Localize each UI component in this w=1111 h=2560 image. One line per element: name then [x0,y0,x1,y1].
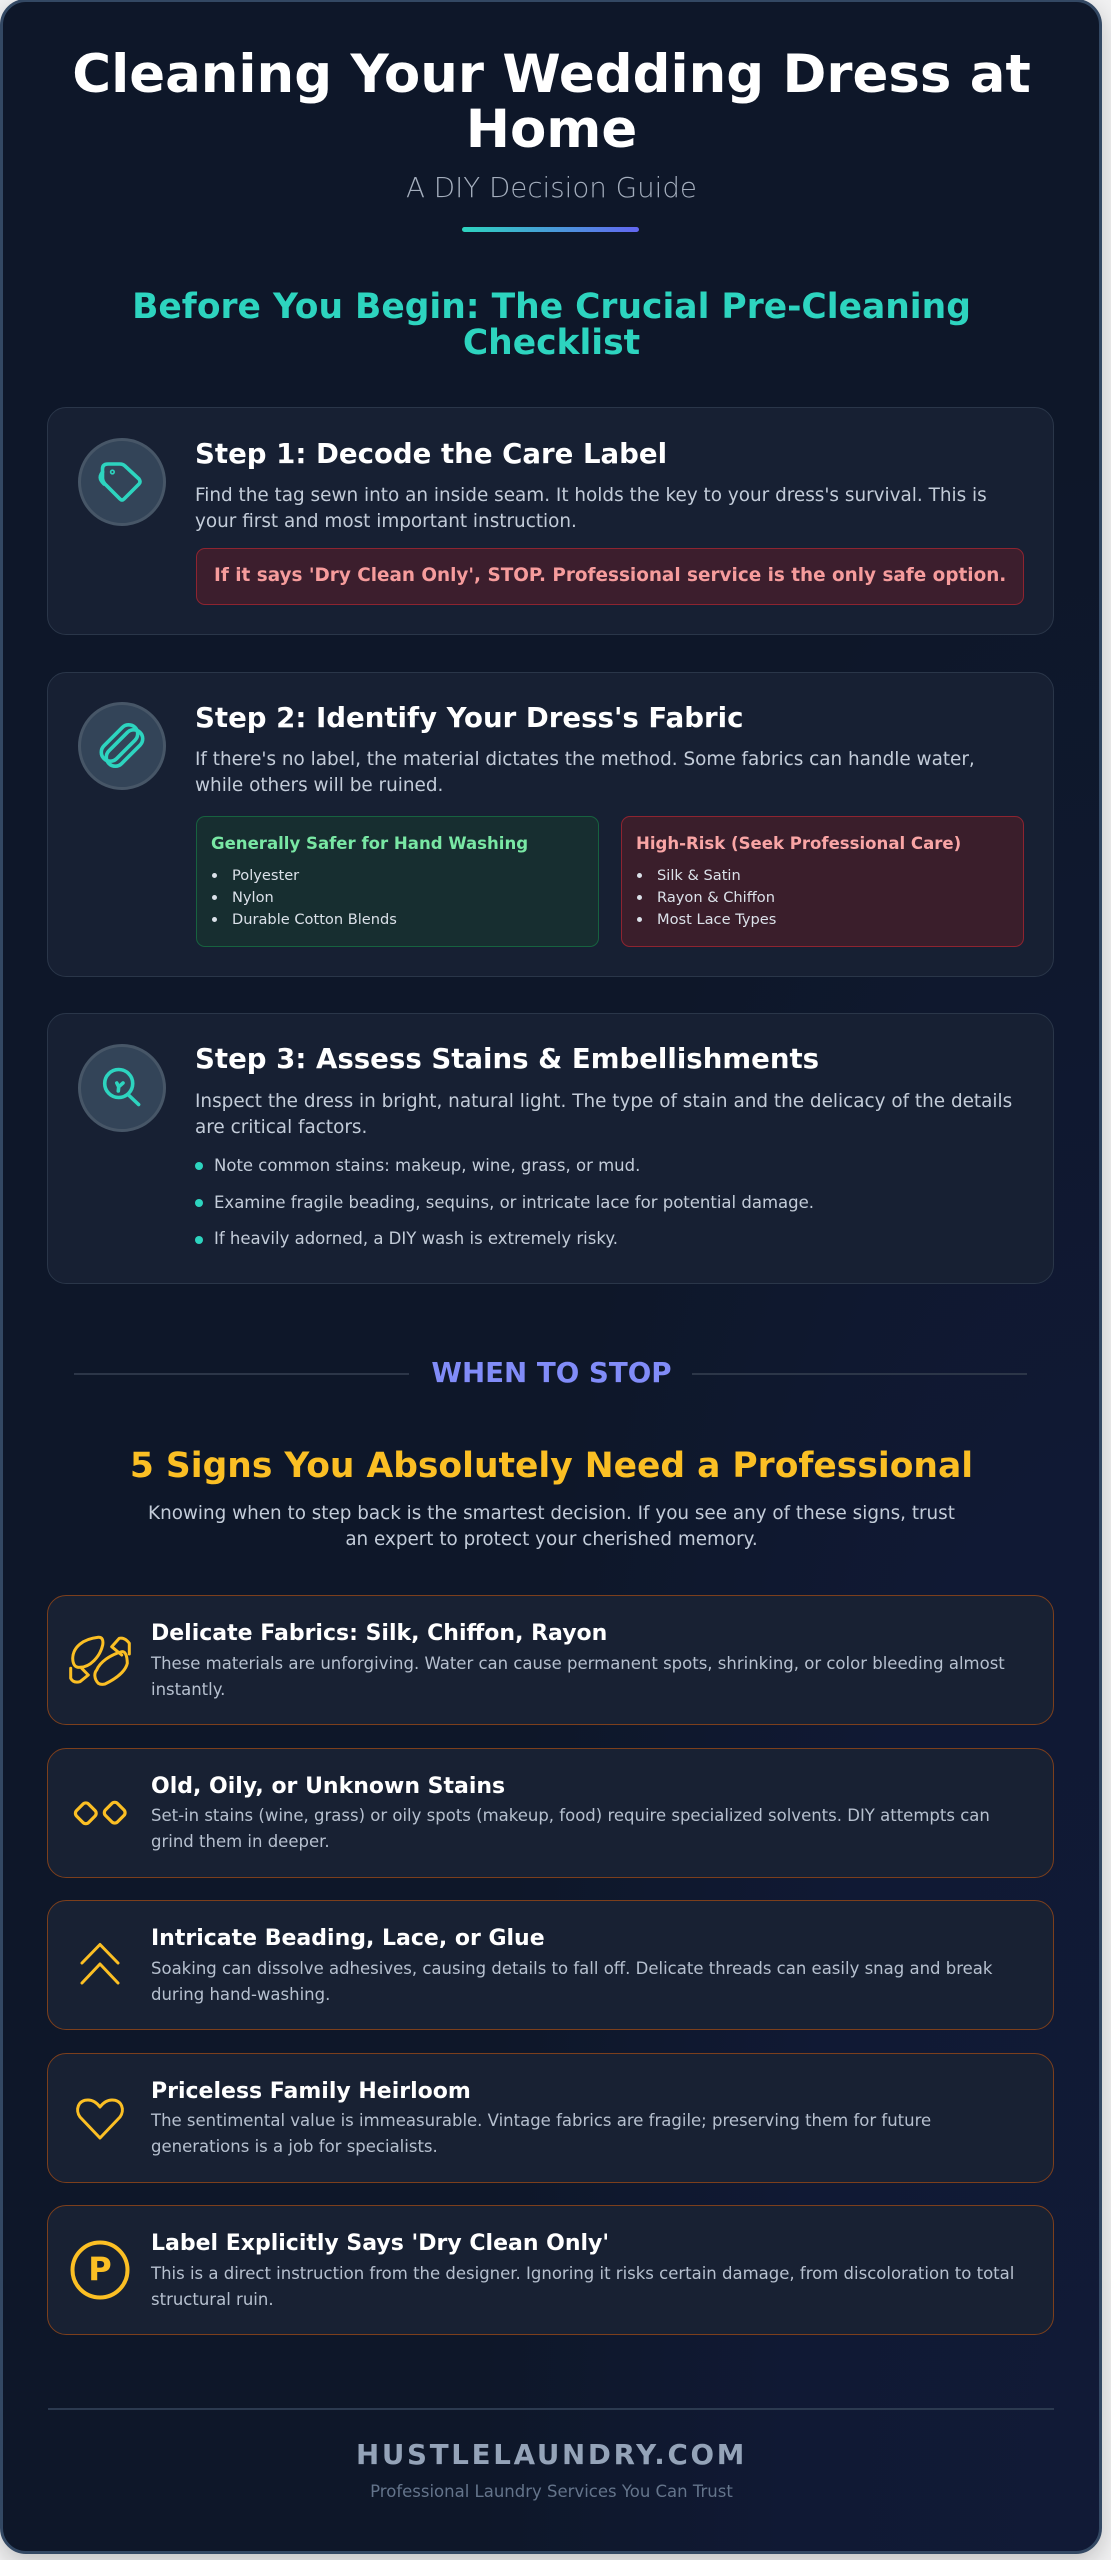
panel: step 3 [47,1013,1054,1284]
sign 4 description: generations is a job for specialists. [151,2137,438,2156]
icon: double chevron [80,1942,120,1985]
step 1 heading: Step 1: Decode the Care Label [195,437,667,470]
panel: high-risk fabrics [621,816,1024,947]
panel: sign 2 [47,1748,1054,1878]
gradient accent bar [462,227,639,232]
section intro [148,1502,955,1550]
panel: sign 4 [47,2053,1054,2183]
safer fabrics list: Polyester [232,866,299,884]
high-risk list: Silk & Satin [657,866,741,884]
panel: safer fabrics [196,816,599,947]
title [72,44,1031,160]
title: Cleaning Your Wedding Dress at [72,44,1031,105]
step 1 description: your first and most important instruction. [195,511,577,532]
step 3 description: Inspect the dress in bright, natural light. The type of stain and the delicacy of the details [195,1091,1012,1112]
sign 3 description [151,1959,992,2004]
panel: sign 3 [47,1900,1054,2030]
section heading: checklist: Checklist [463,323,640,363]
icon: heart [76,2098,124,2140]
footer brand: HUSTLELAUNDRY.COM [356,2438,747,2471]
high-risk list: Rayon & Chiffon [657,888,775,906]
sign 1 description: These materials are unforgiving. Water can cause permanent spots, shrinking, or color bleeding almost [151,1654,1005,1673]
panel: sign 5 [47,2205,1054,2335]
sign 3 description: Soaking can dissolve adhesives, causing details to fall off. Delicate threads can easily snag and break [151,1959,992,1978]
icon: fabric [78,702,166,790]
title: Home [466,99,637,160]
text: Examine fragile beading, sequins, or intricate lace for potential damage. [214,1193,814,1212]
warning callout text: If it says 'Dry Clean Only', STOP. Professional service is the only safe option. [214,565,1006,586]
step 2 description [195,749,975,796]
sign 2 description: grind them in deeper. [151,1832,330,1851]
section heading: 5 signs: 5 Signs You Absolutely Need a Professional [130,1446,973,1486]
step 1 description: Find the tag sewn into an inside seam. It holds the key to your dress's survival. This is [195,485,987,506]
section heading: checklist: Before You Begin: The Crucial Pre-Cleaning [132,287,971,327]
sign 5 description: This is a direct instruction from the designer. Ignoring it risks certain damage, from discoloration to total [151,2264,1014,2283]
panel: sign 1 [47,1595,1054,1725]
sign 4 description [150,2111,931,2156]
sign 4 description: The sentimental value is immeasurable. Vintage fabrics are fragile; preserving them for future [151,2111,931,2130]
sign 2 description: Set-in stains (wine, grass) or oily spots (makeup, food) require specialized solvents. DIY attempts can [151,1806,990,1825]
sign 5 description [150,2264,1014,2309]
sign 5 description: structural ruin. [151,2290,274,2309]
step 3 heading: Step 3: Assess Stains & Embellishments [195,1042,819,1075]
step 2 description: If there's no label, the material dictates the method. Some fabrics can handle water, [195,749,975,770]
panel: step 1 [47,407,1054,635]
icon: magnifier [78,1044,166,1132]
sign 1 heading: Delicate Fabrics: Silk, Chiffon, Rayon [151,1620,607,1646]
sign 1 description: instantly. [151,1680,225,1699]
step 2 heading: Step 2: Identify Your Dress's Fabric [195,701,743,734]
sign 2 heading: Old, Oily, or Unknown Stains [151,1774,505,1798]
icon: stains [74,1800,127,1826]
sign 2 description [151,1806,990,1851]
icon: circled P [70,2240,130,2300]
warning callout [196,548,1024,605]
high-risk heading: High-Risk (Seek Professional Care) [636,834,961,853]
step 3 description [195,1091,1012,1138]
sign 3 heading: Intricate Beading, Lace, or Glue [151,1926,545,1950]
divider label: when to stop: WHEN TO STOP [431,1356,672,1389]
section intro: Knowing when to step back is the smartest decision. If you see any of these signs, trust [148,1502,955,1524]
section heading: checklist [132,287,971,363]
safer fabrics list [232,866,397,928]
text: If heavily adorned, a DIY wash is extremely risky. [214,1229,618,1248]
icon: circled P: P [88,2250,112,2288]
footer tagline: Professional Laundry Services You Can Trust [370,2482,733,2501]
subtitle: A DIY Decision Guide [406,171,697,204]
step 1 description [195,485,987,532]
safer fabrics heading: Generally Safer for Hand Washing [211,834,528,853]
step 3 checklist: Note common stains: makeup, wine, grass, or mud. [214,1156,640,1175]
safer fabrics list: Durable Cotton Blends [232,910,397,928]
icon: fabric leaves [69,1636,131,1686]
section intro: an expert to protect your cherished memory. [345,1528,758,1550]
sign 4 heading: Priceless Family Heirloom [151,2078,471,2104]
step 3 description: are critical factors. [195,1117,367,1138]
step 2 description: while others will be ruined. [195,775,443,796]
sign 3 description: during hand-washing. [151,1985,330,2004]
sign 5 heading: Label Explicitly Says 'Dry Clean Only' [151,2230,609,2256]
high-risk list [657,866,776,928]
safer fabrics list: Nylon [232,888,274,906]
sign 1 description [150,1654,1005,1699]
high-risk list: Most Lace Types [657,910,776,928]
panel: step 2 [47,672,1054,977]
icon: tag [78,438,166,526]
